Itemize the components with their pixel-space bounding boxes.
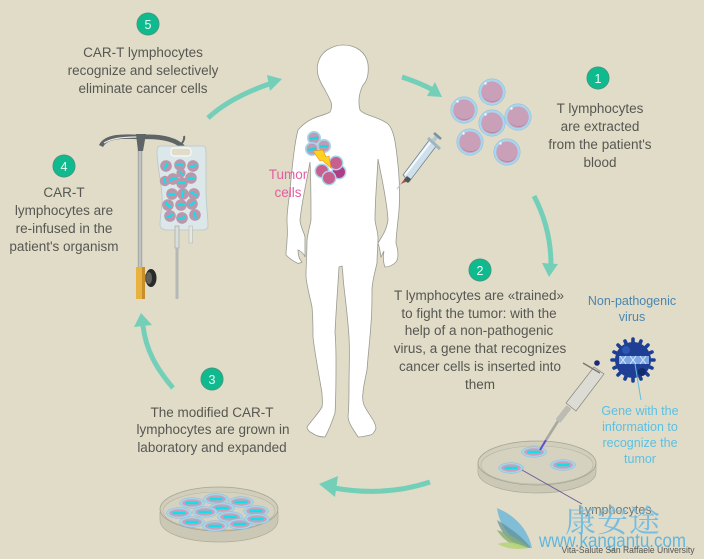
logo: leaves xyxy=(497,508,532,549)
step 4 text: lymphocytes are xyxy=(15,203,113,218)
step 2 badge xyxy=(469,259,491,281)
arrow: body to cells xyxy=(402,77,442,97)
step 5 text: CAR-T lymphocytes xyxy=(83,45,203,60)
icon: lightning bolt xyxy=(313,150,331,168)
step 4 badge: 4 xyxy=(61,160,68,174)
step 2 text: cancer cells is inserted into xyxy=(399,359,561,374)
step 4 text: CAR-T xyxy=(43,185,85,200)
IV bag with CAR-T cells xyxy=(157,146,208,299)
step 4 text: patient's organism xyxy=(9,239,119,254)
label: tumor cells: cells xyxy=(274,185,302,200)
label: non-pathogenic virus: Non-pathogenic xyxy=(588,294,676,308)
label: lymphocytes: Lymphocytes xyxy=(578,503,652,517)
step 4 text: re-infused in the xyxy=(16,221,112,236)
icon: pipette xyxy=(540,360,604,450)
step 2 text: help of a non-pathogenic xyxy=(405,323,554,338)
step 1 text: are extracted xyxy=(561,119,639,134)
step 3 text: laboratory and expanded xyxy=(137,440,287,455)
step 2 badge: 2 xyxy=(477,264,484,278)
step 1 badge: 1 xyxy=(595,72,602,86)
step 5 badge xyxy=(137,13,159,35)
tumor and CAR-T cells in chest xyxy=(306,132,346,185)
label: tumor cells: Tumor xyxy=(269,167,308,182)
watermark: Chinese name: 康安途 xyxy=(565,504,661,539)
step 2 text: virus, a gene that recognizes xyxy=(394,341,567,356)
step 1 text: from the patient's xyxy=(548,137,652,152)
step 1 badge xyxy=(587,67,609,89)
arrow: step 4 to body xyxy=(208,75,282,118)
arrow: cells to step 2 xyxy=(534,196,558,277)
label: gene information: recognize the xyxy=(602,436,678,450)
step 1 text: T lymphocytes xyxy=(557,101,644,116)
step 2 text: them xyxy=(465,377,495,392)
arrow: step 2 to step 3 xyxy=(319,476,430,497)
petri dish: modification xyxy=(478,441,596,493)
step 5 text: recognize and selectively xyxy=(68,63,219,78)
step 3 text: lymphocytes are grown in xyxy=(136,422,290,437)
label: non-pathogenic virus: virus xyxy=(619,310,645,324)
label: gene information: Gene with the xyxy=(601,404,679,418)
step 2 text: to fight the tumor: with the xyxy=(401,306,557,321)
step 5 badge: 5 xyxy=(145,18,152,32)
step 3 text: The modified CAR-T xyxy=(150,405,274,420)
icon: IV stand xyxy=(101,134,184,299)
T lymphocytes group xyxy=(451,79,531,165)
step 5 text: eliminate cancer cells xyxy=(78,81,208,96)
step 3 badge xyxy=(201,368,223,390)
arrow: step 3 to step 4 xyxy=(134,313,173,388)
label: gene information: tumor xyxy=(624,452,656,466)
icon: virus xyxy=(612,339,654,400)
watermark: url: www.kangantu.com xyxy=(538,531,686,552)
human silhouette xyxy=(286,45,400,437)
petri dish: expansion xyxy=(160,487,278,542)
pointer line: lymphocytes xyxy=(522,470,582,504)
step 1 text: blood xyxy=(583,155,617,170)
label: gene information: information to xyxy=(602,420,678,434)
step 4 badge xyxy=(53,155,75,177)
step 2 text: T lymphocytes are «trained» xyxy=(394,288,564,303)
step 3 badge: 3 xyxy=(209,373,216,387)
icon: syringe xyxy=(397,133,441,189)
